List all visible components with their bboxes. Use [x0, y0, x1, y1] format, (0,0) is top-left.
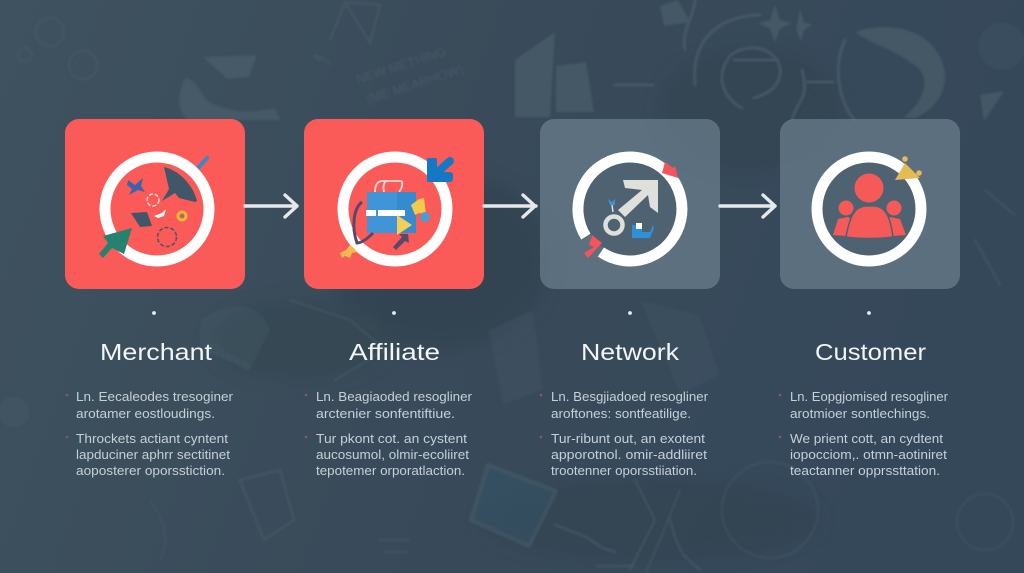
text block: customer description — [779, 390, 948, 478]
text block: customer description: Ln. Eopgjomised resogliner — [790, 390, 948, 404]
heading: Network: Network — [581, 339, 680, 365]
text block: merchant description: Ln. Eecaleodes tresoginer — [76, 390, 233, 404]
text block: affiliate description: tepotemer orporatlaction. — [316, 464, 465, 478]
step 2: affiliate — [304, 119, 484, 289]
text block: network description: trootenner oporsstiiation. — [551, 464, 697, 478]
icon: customer ring — [817, 156, 922, 261]
text block: customer description: teactanner opprssttation. — [790, 464, 940, 478]
panel: network card — [540, 119, 720, 289]
text block: network description: Ln. Besgjiadoed resogliner — [551, 390, 708, 404]
text block: affiliate description: Tur pkont cot. an cystent — [316, 432, 468, 446]
panel: affiliate card — [304, 119, 484, 289]
icon: affiliate ring — [340, 157, 453, 261]
background doodles: (ME MEARHOW) — [364, 61, 465, 107]
heading: Affiliate: Affiliate — [349, 339, 440, 365]
text block: customer description: iopocciom,. otmn-aotiniret — [790, 448, 948, 462]
text block: merchant description: Throckets actiant cyntent — [76, 432, 229, 446]
icon: merchant ring — [99, 157, 209, 261]
text block: network description: aroftones: sontfeatilige. — [551, 407, 691, 421]
text block: customer description: We prient cott, an cydtent — [790, 432, 944, 446]
text block: network description: Tur-ribunt out, an exotent — [551, 432, 706, 446]
marker dots — [152, 311, 871, 315]
text block: customer description: arotmioer sontlechings. — [790, 407, 930, 421]
step 3: network — [540, 119, 720, 289]
text block: merchant description: arotamer eostloudings. — [76, 407, 215, 421]
panel: customer card — [780, 119, 960, 289]
panel: merchant card — [65, 119, 245, 289]
text block: affiliate description: arctenier sonfentiftiue. — [316, 407, 455, 421]
background doodles: NEW METHING — [354, 44, 448, 87]
heading: Customer: Customer — [815, 339, 926, 365]
background doodles: Chance — [207, 339, 253, 374]
text block: affiliate description — [305, 390, 472, 478]
step 4: customer — [780, 119, 960, 289]
heading: Merchant: Merchant — [100, 339, 213, 365]
step 1: merchant — [65, 119, 245, 289]
text block: network description: apporotnol. omir-addliiret — [551, 448, 708, 462]
arrow: affiliate to network — [484, 195, 536, 217]
text block: merchant description: lapduciner aphrr sectitinet — [76, 448, 231, 462]
arrow: merchant to affiliate — [245, 195, 297, 217]
text block: network description — [540, 390, 708, 478]
icon: network ring — [578, 157, 682, 261]
text block: merchant description — [66, 390, 233, 478]
arrow: network to customer — [720, 195, 775, 217]
text block: merchant description: aoposterer oporsstiction. — [76, 464, 225, 478]
text block: affiliate description: Ln. Beagiaoded resogliner — [316, 390, 472, 404]
text block: affiliate description: aucosumol, olmir-ecoliiret — [316, 448, 470, 462]
